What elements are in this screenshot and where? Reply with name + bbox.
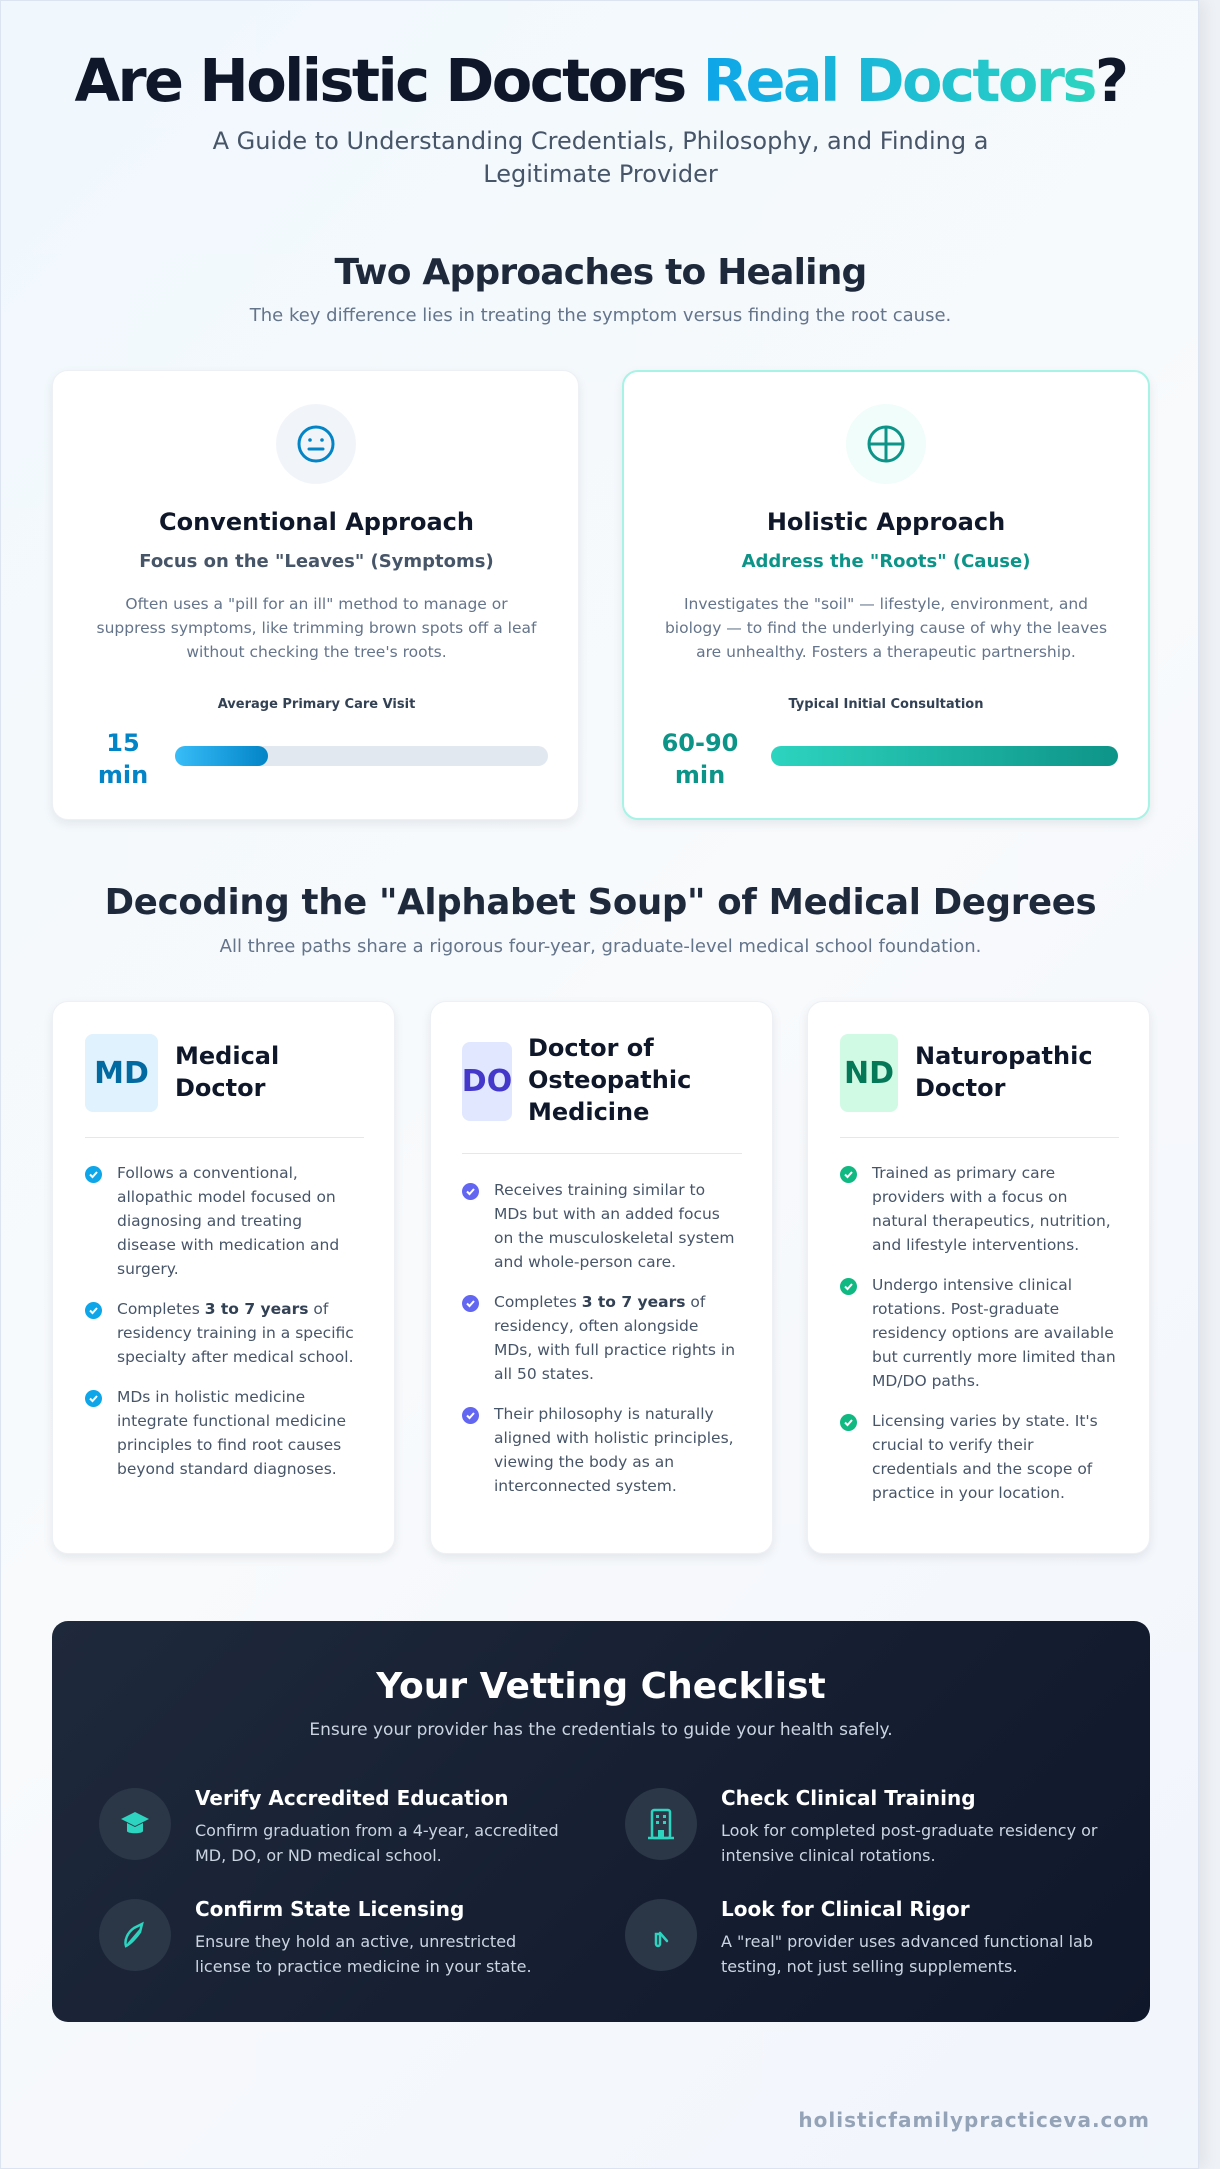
subheading: Ensure your provider has the credentials to guide your health safely.: [309, 1720, 893, 1740]
icon: circle cross: [846, 404, 926, 484]
title: Are Holistic Doctors Real Doctors?: [74, 46, 1126, 115]
item: clinical training: Look for completed post-graduate residency or intensive clinical rotations.: [721, 1821, 1098, 1865]
item: education: [99, 1786, 559, 1865]
panel: vetting checklist: [52, 1621, 1150, 2022]
list: Follows a conventional, allopathic model focused on diagnosing and treating disease with medication and surgery.: [117, 1164, 339, 1278]
heading: degrees: Decoding the "Alphabet Soup" of Medical Degrees: [105, 882, 1096, 923]
item: clinical rigor: [625, 1897, 1093, 1976]
bar chart: visit length: Average Primary Care Visit: [218, 697, 415, 712]
list: Completes 3 to 7 years of residency, often alongside MDs, with full practice rights in all 50 states.: [494, 1293, 735, 1383]
subheading: Focus on the "Leaves" (Symptoms): [139, 551, 494, 572]
item: licensing: Ensure they hold an active, unrestricted license to practice medicine in your state.: [195, 1932, 532, 1976]
footer: website: holisticfamilypracticeva.com: [798, 2108, 1150, 2132]
list: [85, 1164, 354, 1478]
item: clinical training: Check Clinical Training: [721, 1786, 976, 1810]
panel: DO: [430, 1001, 773, 1554]
subtitle: A Guide to Understanding Credentials, Philosophy, and Finding a Legitimate Provider: [213, 127, 988, 188]
icon: graduation cap: [99, 1788, 171, 1860]
bar chart: consultation length: [662, 697, 1118, 789]
item: clinical rigor: Look for Clinical Rigor: [721, 1897, 970, 1921]
icon: neutral face: [276, 404, 356, 484]
list: Their philosophy is naturally aligned with holistic principles, viewing the body as an interconnected system.: [494, 1405, 734, 1495]
bar chart: consultation length: Typical Initial Consultation: [788, 697, 984, 712]
badge: ND: ND: [844, 1056, 894, 1090]
subheading: two approaches: The key difference lies in treating the symptom versus finding the root cause.: [250, 305, 951, 326]
badge: ND: [840, 1034, 898, 1112]
icon: hospital building: [625, 1788, 697, 1860]
description: Often uses a "pill for an ill" method to manage or suppress symptoms, like trimming brown spots off a leaf without checking the tree's roots.: [97, 595, 536, 661]
list: MDs in holistic medicine integrate functional medicine principles to find root causes beyond standard diagnoses.: [117, 1388, 346, 1478]
description: Investigates the "soil" — lifestyle, environment, and biology — to find the underlying cause of why the leaves are unhealthy. Fosters a therapeutic partnership.: [665, 595, 1107, 661]
panel: MD: [52, 1001, 395, 1554]
heading: Medical Doctor: [175, 1042, 279, 1102]
subheading: degrees: All three paths share a rigorous four-year, graduate-level medical school foundation.: [220, 936, 981, 957]
item: clinical rigor: A "real" provider uses advanced functional lab testing, not just selling supplements.: [721, 1932, 1093, 1976]
panel: conventional approach: [52, 370, 579, 820]
heading: Doctor of Osteopathic Medicine: [528, 1034, 691, 1126]
bar chart: visit length: 15: [106, 729, 140, 757]
list: Completes 3 to 7 years of residency training in a specific specialty after medical school.: [117, 1300, 354, 1366]
bar chart: consultation length: min: [675, 761, 725, 789]
item: licensing: [99, 1897, 532, 1976]
heading: Your Vetting Checklist: [376, 1666, 826, 1707]
item: clinical training: [625, 1786, 1098, 1865]
subheading: Address the "Roots" (Cause): [742, 551, 1030, 572]
bar chart: consultation length: 60-90: [662, 729, 738, 757]
item: education: Verify Accredited Education: [195, 1786, 509, 1810]
list: Undergo intensive clinical rotations. Post-graduate residency options are available but currently more limited than MD/DO paths.: [872, 1276, 1116, 1390]
icon: lab test tube: [625, 1899, 697, 1971]
badge: MD: MD: [94, 1056, 149, 1090]
list: Licensing varies by state. It's crucial to verify their credentials and the scope of practice in your location.: [872, 1412, 1098, 1502]
badge: DO: [462, 1042, 512, 1121]
item: education: Confirm graduation from a 4-year, accredited MD, DO, or ND medical school.: [195, 1821, 559, 1865]
icon: signature pen: [99, 1899, 171, 1971]
heading: Holistic Approach: [767, 508, 1005, 536]
panel: ND: [807, 1001, 1150, 1554]
badge: MD: [85, 1034, 158, 1112]
list: [840, 1164, 1116, 1502]
list: Trained as primary care providers with a focus on natural therapeutics, nutrition, and lifestyle interventions.: [872, 1164, 1111, 1254]
heading: two approaches: Two Approaches to Healing: [334, 252, 867, 293]
list: [462, 1181, 735, 1495]
bar chart: visit length: min: [98, 761, 148, 789]
panel: holistic approach: [622, 370, 1150, 820]
heading: Naturopathic Doctor: [915, 1042, 1093, 1102]
list: Receives training similar to MDs but with an added focus on the musculoskeletal system and whole-person care.: [494, 1181, 734, 1271]
heading: Conventional Approach: [159, 508, 474, 536]
bar chart: visit length: [98, 697, 548, 789]
badge: DO: DO: [462, 1064, 512, 1099]
item: licensing: Confirm State Licensing: [195, 1897, 464, 1921]
